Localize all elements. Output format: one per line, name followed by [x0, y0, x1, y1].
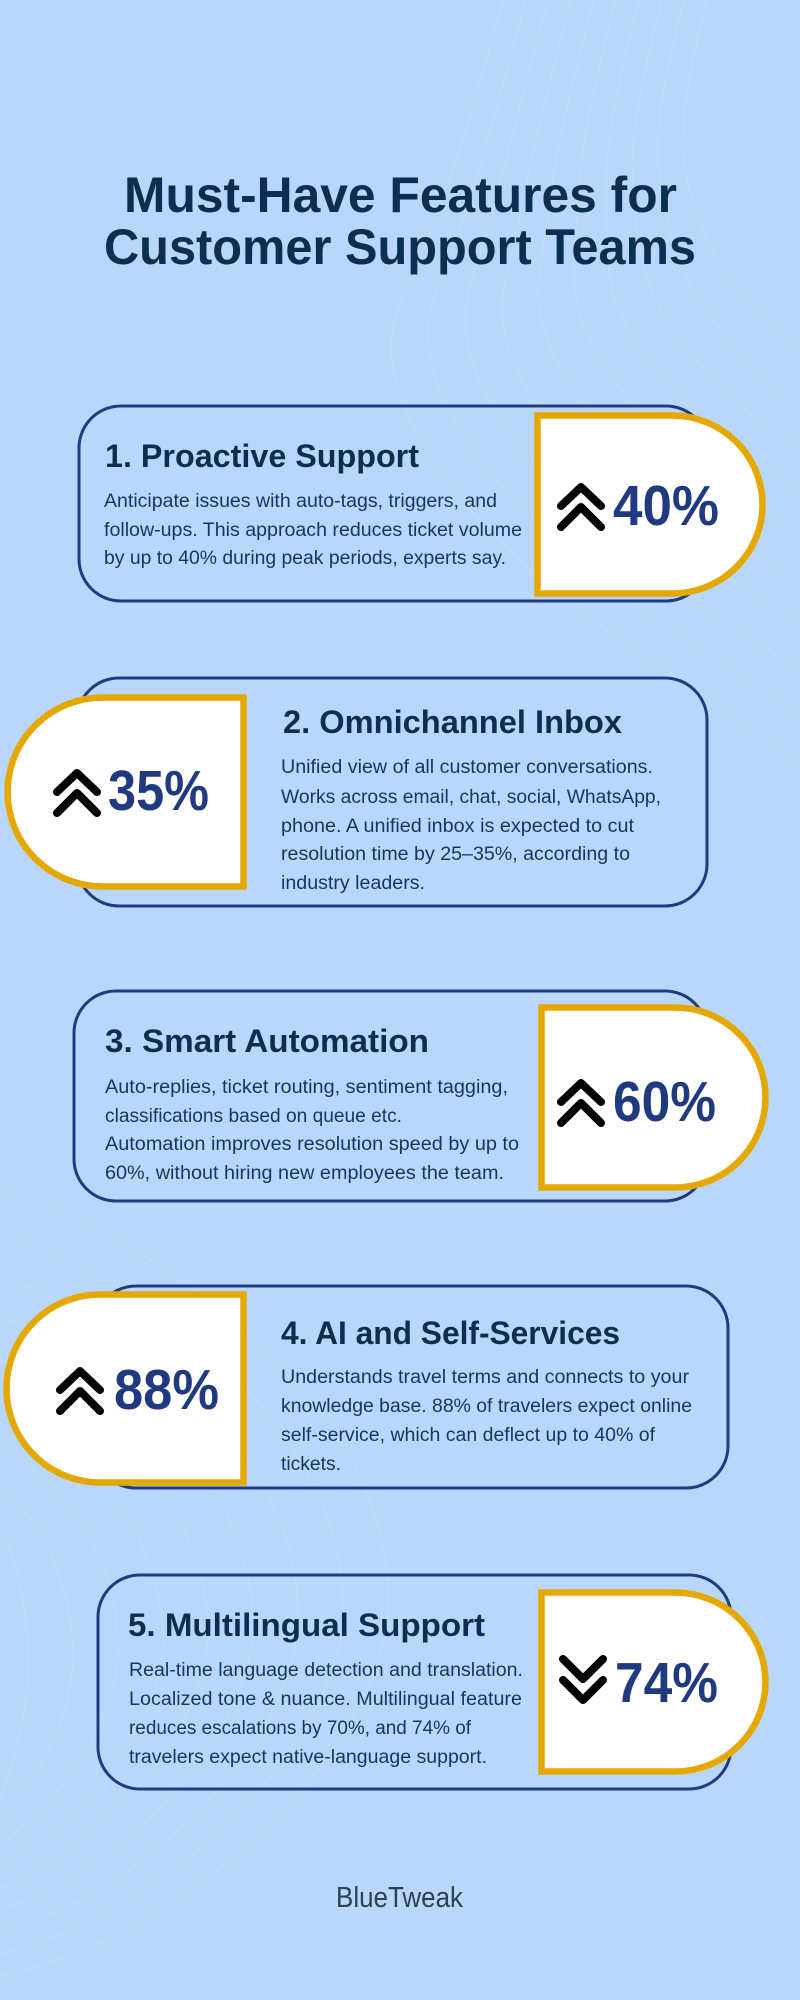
- stat: 74%: 74%: [615, 1651, 718, 1715]
- text block: Omnichannel Inbox description: resolution time by 25–35%, according to: [281, 844, 630, 865]
- text block: Smart Automation description: classifications based on queue etc.: [105, 1106, 402, 1127]
- icon: double chevron up: [60, 1371, 100, 1411]
- text block: AI and Self-Services description: [281, 1367, 692, 1475]
- stat: 40%: 40%: [613, 474, 719, 538]
- text block: Proactive Support description: [104, 491, 522, 569]
- text block: Proactive Support description: Anticipate issues with auto-tags, triggers, and: [104, 491, 497, 512]
- heading: Smart Automation: 3. Smart Automation: [105, 1023, 429, 1059]
- text block: Omnichannel Inbox description: industry leaders.: [281, 873, 425, 894]
- text block: Proactive Support description: by up to 40% during peak periods, experts say.: [104, 548, 506, 569]
- text block: Multilingual Support description: [129, 1660, 523, 1768]
- text block: AI and Self-Services description: self-service, which can deflect up to 40% of: [281, 1425, 656, 1446]
- stat: 88%: 88%: [114, 1358, 219, 1422]
- text block: Omnichannel Inbox description: Works across email, chat, social, WhatsApp,: [281, 787, 661, 808]
- heading: AI and Self-Services: 4. AI and Self-Services: [281, 1315, 620, 1351]
- icon: double chevron down: [563, 1659, 603, 1700]
- panel: 5. Multilingual Support: [98, 1575, 766, 1789]
- text block: AI and Self-Services description: Understands travel terms and connects to your: [281, 1367, 690, 1388]
- stat badge: 60%: [542, 1008, 766, 1188]
- icon: double chevron up: [561, 487, 601, 527]
- title: Must-Have Features for: [124, 167, 677, 223]
- heading: Multilingual Support: 5. Multilingual Support: [128, 1607, 485, 1643]
- panel: 4. AI and Self-Services: [6, 1286, 728, 1488]
- stat: 35%: 35%: [108, 759, 209, 823]
- stat badge: 88%: [6, 1294, 243, 1482]
- stat: 60%: 60%: [613, 1070, 716, 1134]
- text block: Omnichannel Inbox description: phone. A unified inbox is expected to cut: [281, 816, 635, 837]
- footer logo text: BlueTweak: BlueTweak: [336, 1882, 463, 1914]
- stat badge: 74%: [542, 1592, 766, 1772]
- text block: Multilingual Support description: reduces escalations by 70%, and 74% of: [129, 1718, 472, 1739]
- text block: Smart Automation description: 60%, without hiring new employees the team.: [105, 1163, 504, 1184]
- panel: 1. Proactive Support: [79, 406, 763, 601]
- text block: AI and Self-Services description: tickets.: [281, 1454, 341, 1475]
- text block: AI and Self-Services description: knowledge base. 88% of travelers expect online: [281, 1396, 692, 1417]
- panel: 3. Smart Automation: [74, 991, 766, 1201]
- text block: Multilingual Support description: travelers expect native-language support.: [129, 1747, 487, 1768]
- panel: 2. Omnichannel Inbox: [8, 678, 707, 906]
- text block: Multilingual Support description: Localized tone & nuance. Multilingual feature: [129, 1689, 522, 1710]
- title: Customer Support Teams: [104, 219, 696, 275]
- icon: double chevron up: [561, 1083, 601, 1123]
- text block: Smart Automation description: Automation improves resolution speed by up to: [105, 1134, 519, 1155]
- text block: Omnichannel Inbox description: [281, 757, 661, 894]
- heading: Omnichannel Inbox: 2. Omnichannel Inbox: [283, 704, 622, 740]
- text block: Proactive Support description: follow-ups. This approach reduces ticket volume: [104, 520, 522, 541]
- stat badge: 35%: [8, 698, 243, 886]
- icon: double chevron up: [57, 773, 97, 813]
- text block: Multilingual Support description: Real-time language detection and translation.: [129, 1660, 523, 1681]
- stat badge: 40%: [538, 416, 763, 594]
- text block: Smart Automation description: Auto-replies, ticket routing, sentiment tagging,: [105, 1077, 508, 1098]
- text block: Smart Automation description: [105, 1077, 519, 1184]
- text block: Omnichannel Inbox description: Unified view of all customer conversations.: [281, 757, 653, 778]
- heading: Proactive Support: 1. Proactive Support: [105, 438, 419, 474]
- title: [104, 167, 696, 275]
